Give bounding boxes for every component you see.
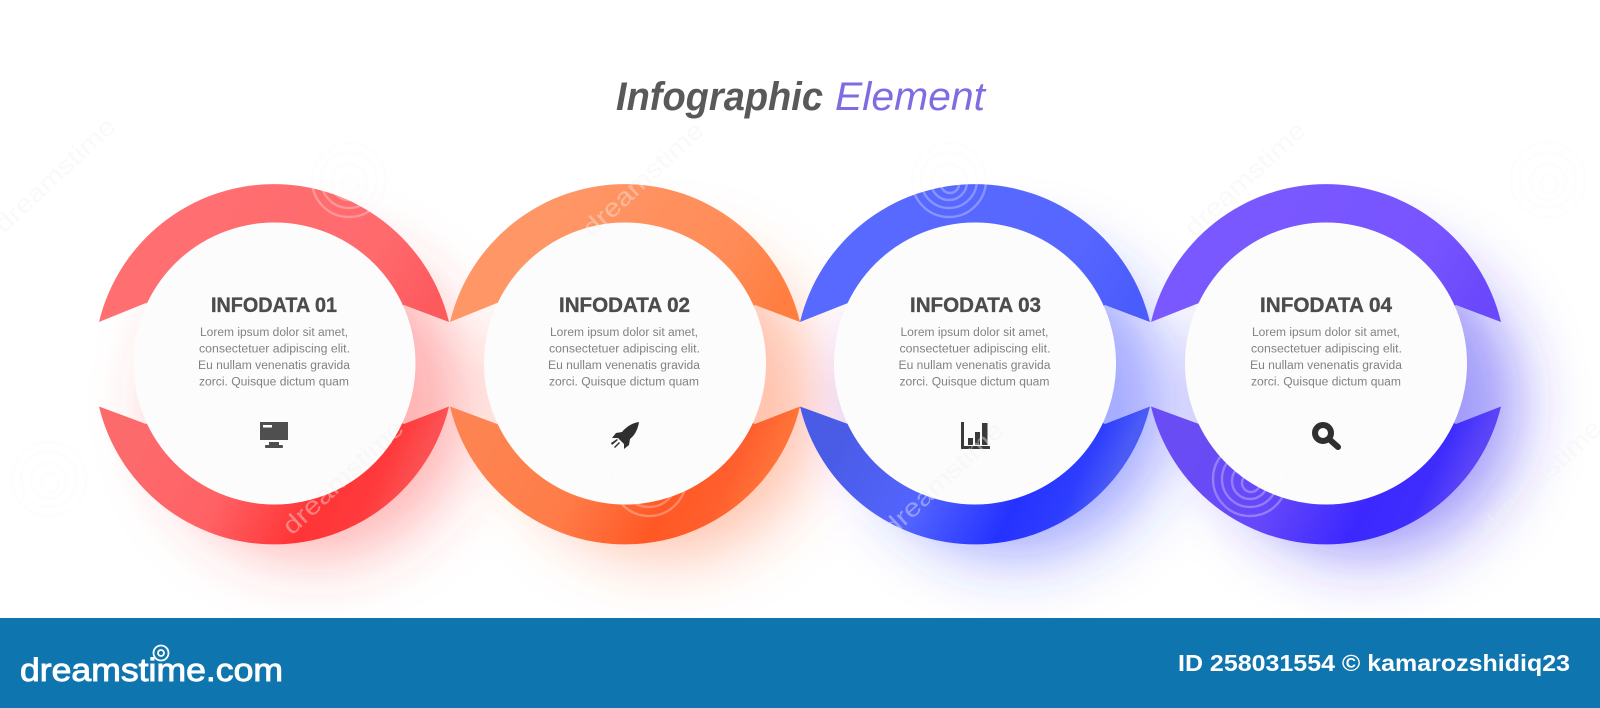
image id and author: ID 258031554 © kamarozshidiq23	[1178, 650, 1570, 676]
panel: infodata 03	[800, 184, 1150, 544]
panel: infodata 02	[450, 184, 800, 544]
ring lower arc	[1151, 363, 1501, 544]
body text: Lorem ipsum dolor sit amet,	[900, 327, 1048, 339]
title: Infographic	[616, 75, 823, 119]
body text: Lorem ipsum dolor sit amet,	[200, 327, 348, 339]
body text	[898, 327, 1051, 388]
watermark overlay: dreamstime	[577, 116, 709, 242]
watermark overlay: dreamstime	[1179, 116, 1311, 242]
body text: consectetuer adipiscing elit.	[199, 344, 350, 356]
body text: consectetuer adipiscing elit.	[1251, 344, 1402, 356]
watermark overlay: dreamstime	[1475, 414, 1600, 540]
watermark overlay	[0, 112, 1600, 542]
ring upper arc	[450, 184, 800, 363]
body text	[1250, 327, 1403, 388]
ring lower arc	[800, 363, 1150, 544]
heading: INFODATA 03	[910, 294, 1041, 317]
watermark overlay: dreamstime	[877, 416, 1009, 542]
panel: infodata 01	[99, 184, 449, 544]
heading: INFODATA 01	[211, 294, 337, 317]
heading: INFODATA 02	[559, 294, 690, 317]
body text: Eu nullam venenatis gravida	[1250, 360, 1403, 372]
soft coloured shadows	[159, 248, 1520, 558]
white disc	[834, 222, 1116, 504]
ring upper arc	[1151, 184, 1501, 363]
ring upper arc	[800, 184, 1150, 363]
body text: Eu nullam venenatis gravida	[198, 360, 351, 372]
title	[616, 75, 987, 119]
logo spiral	[154, 646, 168, 660]
body text: consectetuer adipiscing elit.	[900, 344, 1050, 356]
logo wordmark: dreamstime.com	[20, 652, 283, 688]
body text: Eu nullam venenatis gravida	[898, 360, 1051, 372]
body text: zorci. Quisque dictum quam	[199, 376, 349, 388]
body text: consectetuer adipiscing elit.	[549, 344, 700, 356]
watermark overlay: dreamstime	[277, 414, 409, 540]
icon: magnifier	[1315, 425, 1338, 447]
icon: monitor	[260, 422, 288, 448]
body text: Lorem ipsum dolor sit amet,	[1252, 327, 1400, 339]
white disc	[484, 222, 766, 504]
body text: zorci. Quisque dictum quam	[1251, 376, 1401, 388]
body text: zorci. Quisque dictum quam	[549, 376, 699, 388]
body text	[548, 327, 701, 388]
body text	[198, 327, 351, 388]
body text: Eu nullam venenatis gravida	[548, 360, 701, 372]
icon: bar chart	[961, 422, 990, 449]
ring lower arc	[450, 363, 800, 544]
title: Element	[835, 75, 987, 119]
icon: rocket	[611, 422, 639, 449]
white disc	[134, 222, 416, 504]
ring upper arc	[99, 184, 449, 363]
body text: Lorem ipsum dolor sit amet,	[550, 327, 698, 339]
footer banner	[0, 618, 1600, 708]
body text: zorci. Quisque dictum quam	[900, 376, 1050, 388]
ring lower arc	[99, 363, 449, 544]
white disc	[1185, 222, 1467, 504]
panel: infodata 04	[1151, 184, 1501, 544]
heading: INFODATA 04	[1260, 294, 1392, 317]
